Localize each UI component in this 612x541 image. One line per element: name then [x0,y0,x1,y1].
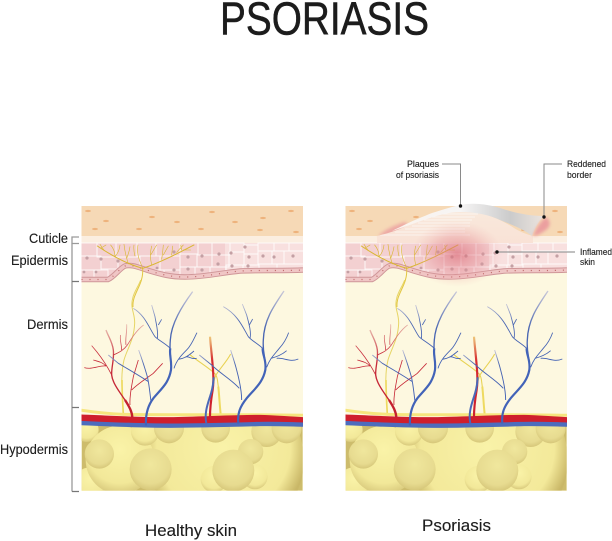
layer label: Hypodermis: Hypodermis [0,441,68,457]
layer bracket [72,237,79,492]
layer label: Dermis: Dermis [27,316,68,332]
callout: inflamed skin [495,247,612,268]
callout: reddened border [542,159,606,219]
callout: reddened border: border [567,170,592,181]
inflamed area [411,221,503,287]
callout: plaques of psoriasis [396,159,462,208]
layer label: Epidermis: Epidermis [11,252,68,268]
caption: psoriasis: Psoriasis [422,516,491,535]
reddish patch on left of plaque [378,222,414,236]
callout: plaques of psoriasis: of psoriasis [396,170,439,181]
white plaque scale [392,204,544,236]
panel: healthy skin cross-section [74,206,305,537]
raised plaque dome [377,210,533,243]
callout: inflamed skin: skin [580,257,595,268]
panel: psoriasis skin cross-section [346,204,567,491]
callout: reddened border: Reddened [567,159,606,170]
callout: plaques of psoriasis: Plaques [407,159,439,170]
layer label: Cuticle: Cuticle [29,230,68,246]
caption: healthy skin: Healthy skin [145,521,237,540]
reddened border [533,217,550,236]
